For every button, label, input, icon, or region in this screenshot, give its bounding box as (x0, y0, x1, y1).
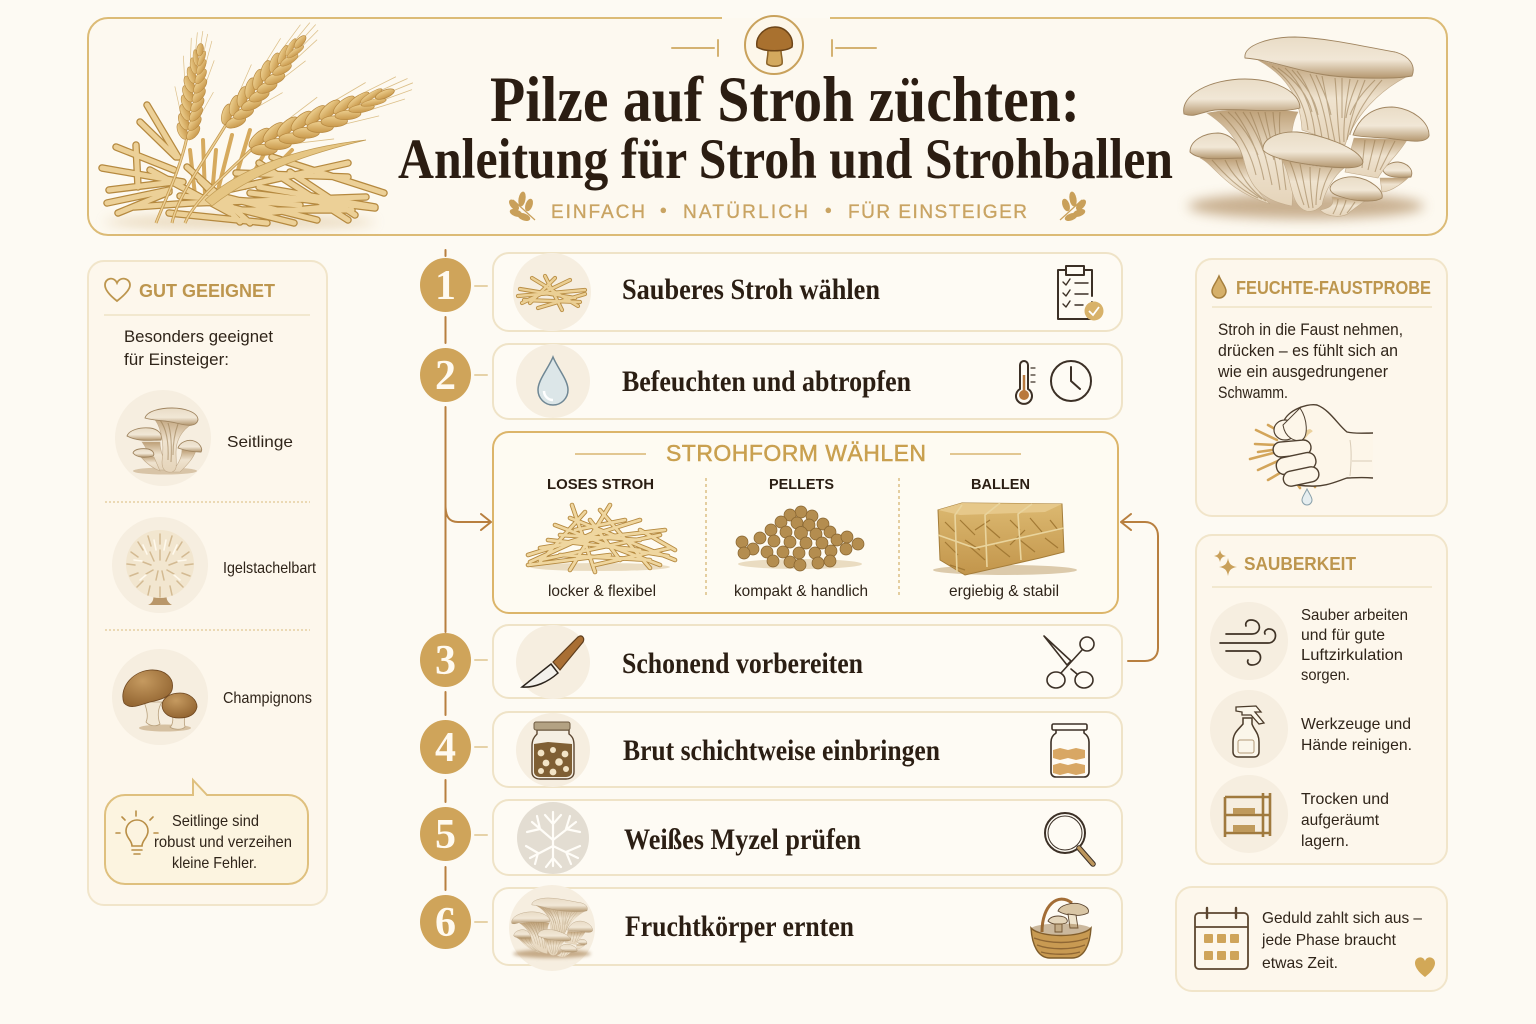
icon: fist squeezing straw (1250, 405, 1373, 505)
step 4: Brut schichtweise einbringen (623, 734, 940, 767)
icon: clock (1051, 361, 1091, 401)
icon: magnifier (1045, 813, 1093, 864)
icon: basket (1031, 899, 1091, 958)
subtitle: NATÜRLICH (683, 202, 808, 223)
step 6 (420, 885, 1122, 971)
icon: water drop (516, 344, 590, 418)
subtitle: EINFACH (551, 202, 645, 223)
panel: sauberkeit (1196, 535, 1447, 864)
option: pellets: PELLETS (769, 477, 834, 493)
step 1: Sauberes Stroh wählen (622, 273, 880, 306)
body text: etwas Zeit. (1262, 955, 1338, 972)
number 1 (420, 258, 471, 312)
option: pellets: kompakt & handlich (734, 583, 868, 600)
body text: drücken – es fühlt sich an (1218, 341, 1398, 360)
icon: mushroom medallion (672, 16, 876, 74)
step 5 (420, 800, 1122, 875)
number 4 (420, 720, 471, 774)
option: ballen (933, 477, 1077, 600)
option: loses stroh: locker & flexibel (548, 583, 656, 600)
body text: jede Phase braucht (1261, 932, 1397, 949)
flow lines (446, 250, 491, 922)
step 3: Schonend vorbereiten (622, 647, 863, 680)
item: spray: Hände reinigen. (1301, 737, 1412, 754)
illustration: oyster mushrooms (1184, 37, 1429, 219)
heading: gut geeignet: GUT GEEIGNET (139, 281, 275, 301)
icon: harvested mushrooms (509, 885, 595, 971)
number 6: 6 (435, 900, 456, 946)
number 1: 1 (435, 263, 456, 309)
item: Igelstachelbart: Igelstachelbart (223, 560, 316, 577)
number 5: 5 (435, 812, 456, 858)
item: shelf: lagern. (1301, 833, 1349, 850)
icon: knife (516, 625, 590, 699)
number 5 (420, 807, 471, 861)
icon: drop (1212, 276, 1226, 298)
item: air: sorgen. (1301, 667, 1350, 684)
callout: Seitlinge tip (105, 780, 308, 884)
title: Anleitung für Stroh und Strohballen (398, 128, 1173, 191)
title: Pilze auf Stroh züchten: (490, 64, 1080, 136)
item: Champignons (112, 649, 312, 745)
subtitle: • (825, 201, 832, 222)
panel: geduld (1176, 887, 1447, 991)
body text: wie ein ausgedrungener (1217, 362, 1388, 381)
step 6: Fruchtkörper ernten (625, 910, 854, 943)
icon: mycelium (517, 802, 589, 874)
body text: Geduld zahlt sich aus – (1262, 910, 1422, 927)
subtitle: • (660, 201, 667, 222)
icon: wheat sprigs (508, 192, 1087, 222)
icon: jar outline (1051, 724, 1089, 777)
intro text: für Einsteiger: (124, 350, 229, 369)
body text: Schwamm. (1218, 383, 1288, 402)
option: loses stroh (528, 477, 675, 600)
callout: Seitlinge tip: kleine Fehler. (172, 855, 257, 872)
item: shelf: Trocken und (1301, 791, 1389, 808)
item: air: und für gute (1301, 627, 1385, 644)
item: air: Luftzirkulation (1301, 647, 1403, 664)
step 5: Weißes Myzel prüfen (624, 823, 861, 856)
icon: sparkle (1214, 550, 1237, 576)
icon: scissors (1044, 636, 1094, 688)
item: spray (1210, 690, 1412, 768)
heading: SAUBERKEIT (1244, 554, 1356, 574)
number 3 (420, 633, 471, 687)
step 4 (420, 712, 1122, 787)
panel: feuchte-faustprobe (1196, 259, 1447, 516)
header banner (88, 10, 1447, 235)
subtitle: FÜR EINSTEIGER (848, 202, 1027, 223)
number 4: 4 (435, 725, 456, 771)
number 2: 2 (435, 353, 456, 399)
icon: straw (513, 253, 591, 331)
panel: strohform wählen (493, 432, 1118, 613)
icon: clipboard (1058, 266, 1104, 320)
heading: FEUCHTE-FAUSTPROBE (1236, 278, 1431, 298)
item: spray: Werkzeuge und (1301, 716, 1411, 733)
illustration: wheat and straw (102, 10, 421, 228)
step 1 (420, 253, 1122, 331)
item: Seitlinge (115, 390, 293, 486)
icon: jar (516, 713, 590, 787)
step 2 (420, 344, 1122, 419)
step 2: Befeuchten und abtropfen (622, 365, 911, 398)
item: shelf (1210, 775, 1389, 853)
number 6 (420, 895, 471, 949)
item: Champignons: Champignons (223, 690, 312, 707)
icon: light bulb (116, 811, 158, 854)
option: ballen: BALLEN (971, 477, 1030, 493)
number 3: 3 (435, 638, 456, 684)
body text: Stroh in die Faust nehmen, (1218, 320, 1403, 339)
option: pellets (734, 477, 868, 600)
item: Seitlinge: Seitlinge (227, 434, 293, 451)
heading: STROHFORM WÄHLEN (666, 440, 926, 466)
item: air (1210, 602, 1408, 684)
item: Igelstachelbart (112, 517, 316, 613)
intro text: Besonders geeignet (124, 327, 273, 346)
option: ballen: ergiebig & stabil (949, 583, 1059, 600)
number 2 (420, 348, 471, 402)
item: shelf: aufgeräumt (1301, 812, 1380, 829)
callout: Seitlinge tip: robust und verzeihen (154, 834, 292, 851)
callout: Seitlinge tip: Seitlinge sind (172, 813, 259, 830)
icon: calendar (1195, 908, 1248, 969)
icon: thermometer (1016, 361, 1035, 404)
option: loses stroh: LOSES STROH (547, 477, 654, 493)
icon: heart outline (105, 279, 130, 301)
panel: gut geeignet (88, 261, 327, 905)
icon: heart (1415, 957, 1435, 977)
title (398, 64, 1173, 191)
arrow: step 3 back to straw form (1121, 514, 1158, 661)
item: air: Sauber arbeiten (1301, 607, 1408, 624)
step 3 (420, 625, 1122, 699)
subtitle (551, 201, 1027, 223)
